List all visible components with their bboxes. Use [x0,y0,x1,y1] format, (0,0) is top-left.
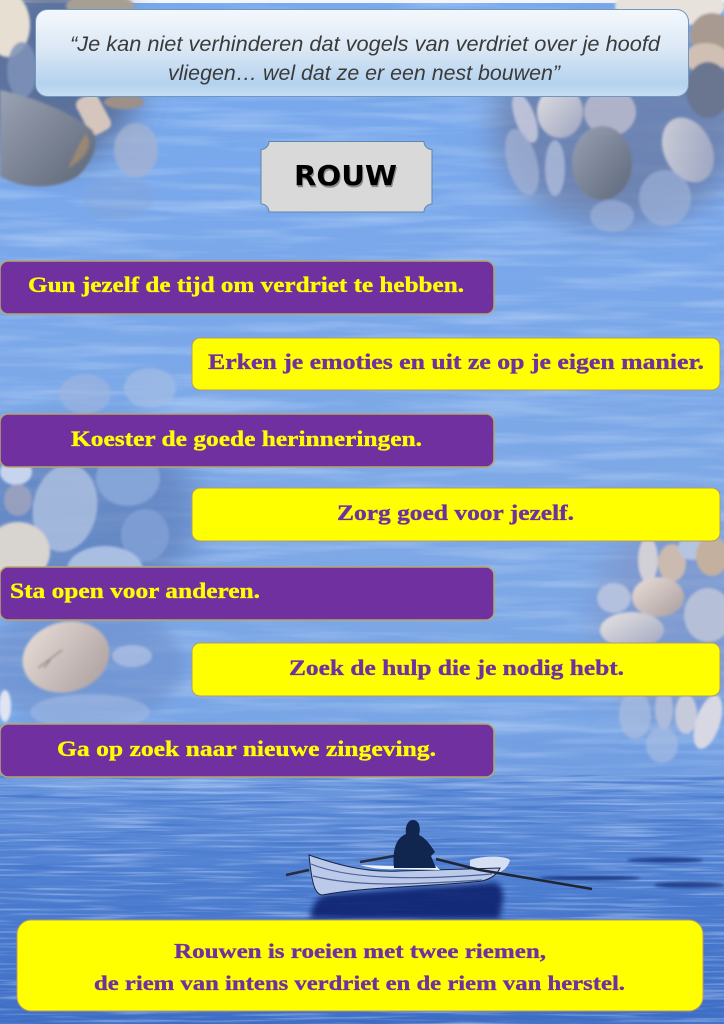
wake streaks [540,858,724,888]
bar 4: Zorg goed voor jezelf. [337,500,574,525]
near oar [436,859,592,889]
title shadow and text: ROUW [295,161,398,194]
bar 6 [192,643,720,696]
bottom note: de riem van intens verdriet en de riem van herstel. [94,971,625,995]
stones: middle left [0,368,200,605]
stones: lower left [0,605,185,730]
bar 4 [192,488,720,541]
stones: top left [0,0,158,220]
bar 5 [0,567,494,620]
bar 1 [0,261,494,314]
bar 1: Gun jezelf de tijd om verdriet te hebben. [28,272,464,297]
quote text [70,33,661,85]
stern seat [470,857,510,874]
bar 6: Zoek de hulp die je nodig hebt. [289,655,624,680]
quote text: vliegen… wel dat ze er een nest bouwen” [168,62,561,85]
stones: top right [495,0,724,232]
bottom note: Rouwen is roeien met twee riemen, [174,939,546,963]
bar 2 [192,338,720,390]
quote text: “Je kan niet verhinderen dat vogels van verdriet over je hoofd [70,33,661,56]
boat reflection [310,882,503,919]
rower [394,820,436,868]
far oar [286,856,394,875]
bottom note [17,920,703,1011]
stones: lower right [595,515,724,763]
quote box [36,10,688,96]
title plaque [261,142,432,212]
bar 7 [0,724,494,777]
bar 7: Ga op zoek naar nieuwe zingeving. [57,736,436,761]
title shadow and text: ROUW [294,159,397,192]
boat interior [360,865,440,870]
boat hull [309,855,500,895]
bar 3: Koester de goede herinneringen. [71,426,422,451]
rowing boat [286,820,592,919]
bar 3 [0,414,494,467]
bar 5: Sta open voor anderen. [10,578,260,603]
bar 2: Erken je emoties en uit ze op je eigen manier. [208,349,704,374]
